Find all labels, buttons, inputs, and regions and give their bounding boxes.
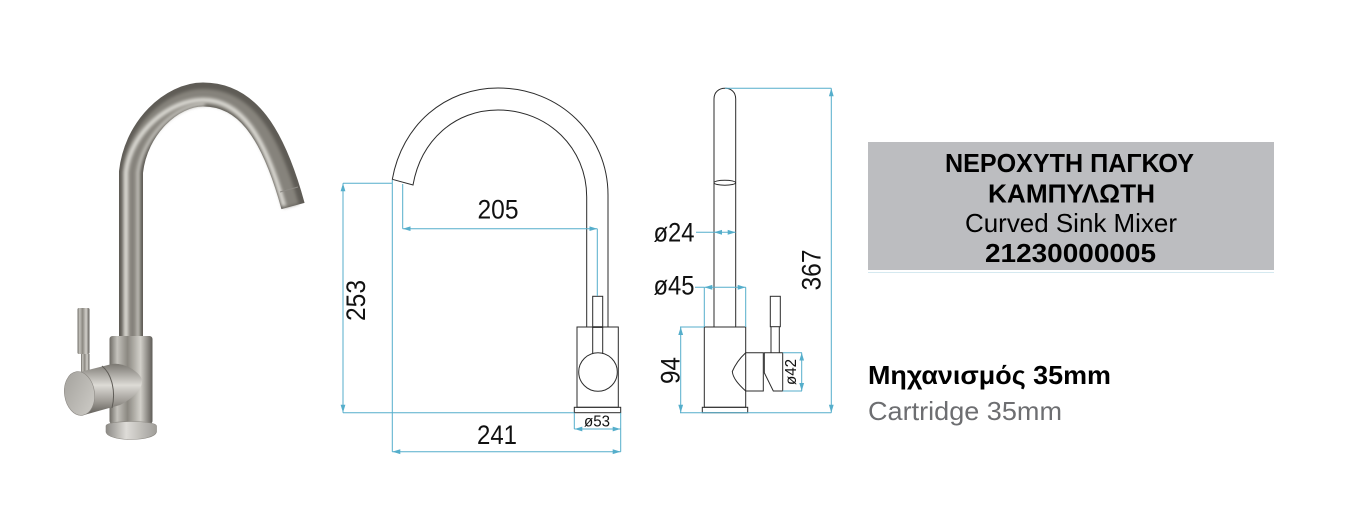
body cylinder — [110, 336, 152, 424]
spout — [126, 94, 298, 340]
front view technical drawing — [341, 88, 621, 452]
mixer hub — [80, 364, 142, 415]
title greek — [945, 148, 1194, 208]
faucet outline front — [392, 88, 621, 413]
product code: 21230000005 — [985, 238, 1156, 268]
title english: Curved Sink Mixer — [965, 208, 1177, 238]
side view technical drawing — [654, 88, 831, 413]
dimension ø24: ø24 — [654, 218, 694, 248]
dimension 241 — [392, 180, 621, 452]
dimension ø45 — [654, 270, 746, 327]
lever handle — [78, 308, 90, 374]
dimension ø53: ø53 — [584, 414, 610, 430]
product photo: curved sink mixer faucet — [62, 94, 298, 440]
dimension 241: 241 — [477, 420, 517, 450]
dimension ø53 — [574, 413, 621, 430]
dimension ø24 — [654, 218, 736, 248]
product title panel — [868, 142, 1274, 272]
dimension 205: 205 — [478, 194, 518, 224]
hub seam — [102, 366, 114, 408]
dimension 367 — [680, 88, 831, 413]
dimension 253: 253 — [341, 280, 371, 321]
title greek: ΚΑΜΠΥΛΩΤΗ — [988, 178, 1155, 208]
base collar — [106, 422, 156, 440]
dimension ø42 — [783, 353, 802, 391]
faucet outline side — [702, 88, 783, 413]
dimension ø45: ø45 — [654, 270, 694, 300]
dimension 94: 94 — [656, 357, 686, 384]
dimension ø42: ø42 — [783, 359, 800, 385]
lever disc — [62, 370, 97, 417]
dimension 253 — [341, 183, 574, 413]
cartridge note english: Cartridge 35mm — [868, 396, 1062, 426]
dimension 94 — [656, 327, 704, 413]
cartridge note greek: Μηχανισμός 35mm — [868, 360, 1111, 390]
dimension 205 — [403, 184, 597, 296]
title greek: ΝΕΡΟΧΥΤΗ ΠΑΓΚΟΥ — [945, 148, 1194, 178]
dimension 367: 367 — [796, 250, 826, 290]
